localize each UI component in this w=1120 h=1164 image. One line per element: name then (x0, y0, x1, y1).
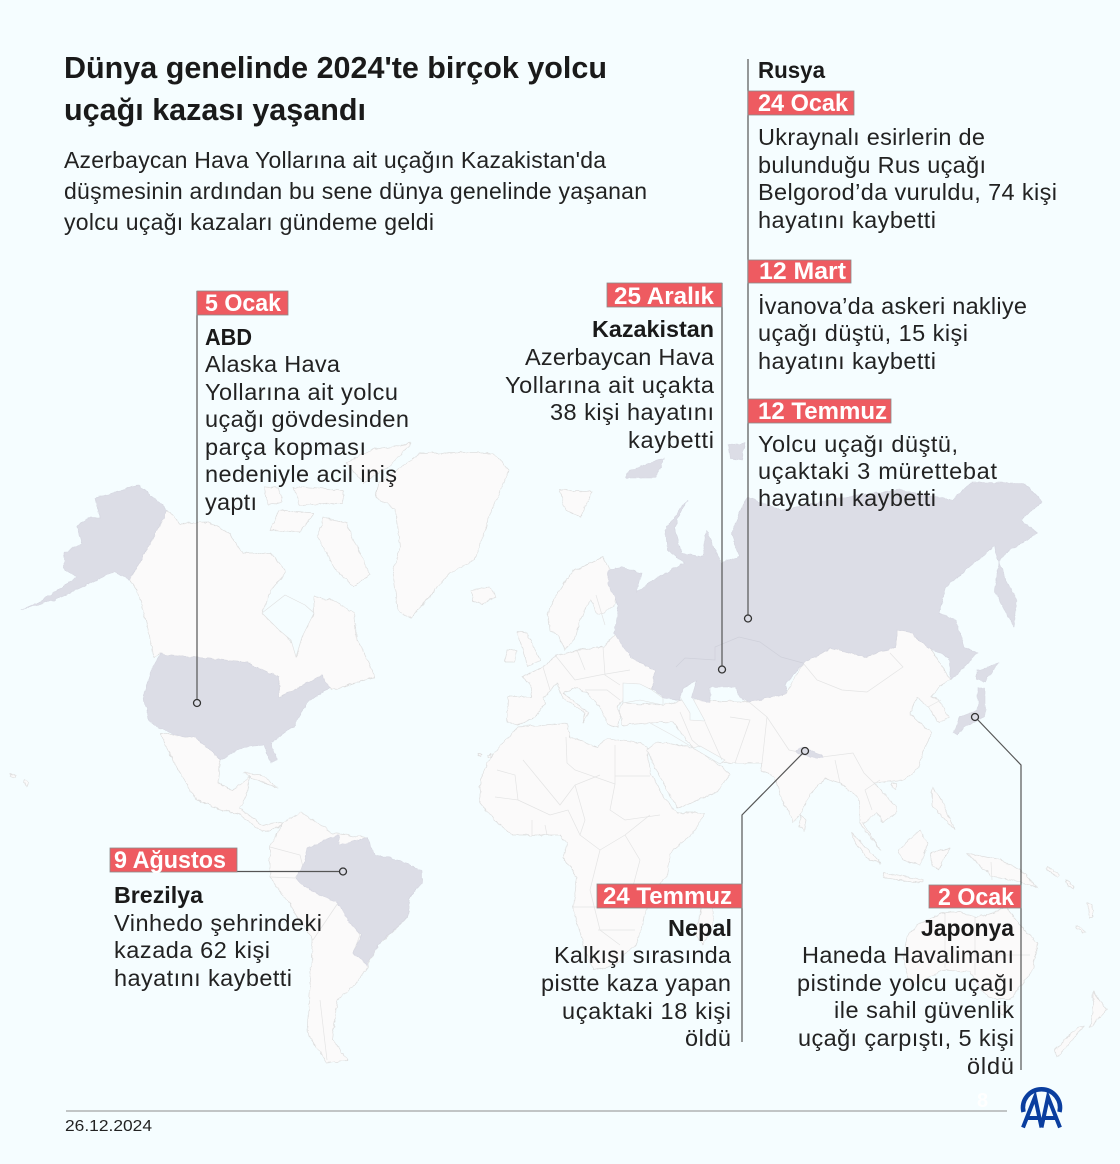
text: 12 Temmuz event: hayatını kaybetti (758, 485, 936, 511)
map: Kazakhstan border (676, 637, 803, 667)
text: 24 Ocak event (758, 124, 1057, 233)
text: ABD event: parça kopması (205, 434, 366, 460)
text: Kazakistan event: Yollarına ait uçakta (505, 372, 715, 398)
text: ABD event: nedeniyle acil iniş (205, 461, 397, 487)
map: highlighted countries (21, 443, 1042, 965)
marker: Brezilya (340, 868, 346, 875)
tag: 5 Ocak: 5 Ocak (205, 290, 282, 317)
faint page number: 8 (977, 1090, 988, 1112)
text: Brezilya event: hayatını kaybetti (114, 965, 292, 991)
country: Franz Josef Land (626, 458, 664, 478)
callout: Brezilya (110, 847, 346, 991)
text: Japonya event: uçağı çarpıştı, 5 kişi (798, 1025, 1014, 1051)
text: ABD event (205, 351, 409, 515)
text: Nepal event: uçaktaki 18 kişi (562, 998, 731, 1024)
map: inner water (262, 595, 725, 764)
leader line: Brezilya (237, 870, 340, 872)
heading: Nepal: Nepal (668, 915, 732, 941)
heading: Japonya: Japonya (921, 915, 1014, 941)
subtitle (64, 147, 647, 235)
tag: 2 Ocak: 2 Ocak (938, 884, 1015, 911)
country: Japan main (953, 687, 985, 735)
text: Nepal event: pistte kaza yapan (541, 970, 731, 996)
text: Nepal event: Kalkışı sırasında (554, 942, 732, 968)
title: Dünya genelinde 2024'te birçok yolcu (64, 50, 607, 85)
text: ABD event: Yollarına ait yolcu (205, 379, 398, 405)
text: 12 Mart event: uçağı düştü, 15 kişi (758, 320, 968, 346)
text: Kazakistan event: Azerbaycan Hava (525, 344, 715, 370)
heading: Rusya: Rusya (758, 57, 825, 83)
country: United States (143, 654, 329, 763)
text: ABD event: Alaska Hava (205, 351, 341, 377)
text: 12 Mart event: İvanova’da askeri nakliye (758, 293, 1027, 319)
text: Japonya event: öldü (967, 1053, 1014, 1079)
tag: 24 Temmuz: 24 Temmuz (603, 883, 732, 910)
leader line: ABD (196, 291, 198, 700)
text: Japonya event: Haneda Havalimanı (802, 942, 1014, 968)
subtitle: düşmesinin ardından bu sene dünya genelinde yaşanan (64, 178, 647, 204)
title (64, 50, 607, 127)
leader line: Kazakistan (721, 283, 723, 666)
marker: Rusya (744, 615, 752, 622)
text: 12 Mart event (758, 293, 1027, 374)
text: 12 Temmuz event: Yolcu uçağı düştü, (758, 431, 958, 457)
heading: ABD: ABD (205, 324, 252, 350)
country: Japan north (976, 663, 999, 682)
text: ABD event: yaptı (205, 489, 257, 515)
heading: Brezilya: Brezilya (114, 882, 203, 908)
marker: Nepal (802, 748, 808, 754)
text: Nepal event (541, 942, 732, 1051)
text: Kazakistan event (505, 344, 715, 453)
date: 26.12.2024 (65, 1118, 152, 1135)
text: Japonya event: ile sahil güvenlik (834, 997, 1014, 1023)
country: Alaska (21, 485, 168, 610)
tag: 24 Ocak: 24 Ocak (758, 90, 849, 117)
leader line: Rusya (747, 59, 749, 615)
country: Brazil (295, 835, 422, 965)
title: uçağı kazası yaşandı (64, 92, 366, 127)
text: 12 Mart event: hayatını kaybetti (758, 348, 936, 374)
text: 12 Temmuz event (758, 431, 997, 511)
footer rule (66, 1110, 1007, 1112)
world map (11, 443, 1107, 1063)
leader line: Nepal (742, 754, 802, 1042)
text: 24 Ocak event: hayatını kaybetti (758, 207, 936, 233)
subtitle: yolcu uçağı kazaları gündeme geldi (64, 209, 434, 235)
text: 24 Ocak event: bulunduğu Rus uçağı (758, 152, 986, 178)
callout: Rusya (744, 57, 1057, 622)
text: 24 Ocak event: Belgorod’da vuruldu, 74 kişi (758, 179, 1057, 205)
tag: 12 Temmuz: 12 Temmuz (758, 398, 887, 425)
tag: 12 Mart: 12 Mart (759, 258, 846, 285)
text: Kazakistan event: 38 kişi hayatını (550, 399, 714, 425)
callout: ABD (194, 290, 409, 706)
country: Nepal (796, 747, 822, 758)
country: Russia and Kazakhstan (608, 483, 1042, 702)
text: Brezilya event: kazada 62 kişi (114, 937, 270, 963)
heading: Kazakistan: Kazakistan (592, 316, 714, 342)
subtitle: Azerbaycan Hava Yollarına ait uçağın Kazakistan'da (64, 147, 606, 173)
text: Kazakistan event: kaybetti (628, 427, 714, 453)
country: Sakhalin (994, 563, 1017, 627)
marker: Japonya (972, 714, 978, 720)
map: borders (270, 595, 1030, 1060)
leader line: Japonya (978, 720, 1021, 1070)
text: Japonya event (797, 942, 1014, 1079)
text: Nepal event: öldü (685, 1025, 731, 1051)
country: Severnaya Zemlya (728, 443, 745, 460)
text: Brezilya event: Vinhedo şehrindeki (114, 910, 322, 936)
text: ABD event: uçağı gövdesinden (205, 406, 409, 432)
icon: AA logo (1023, 1089, 1060, 1128)
text: 12 Temmuz event: uçaktaki 3 mürettebat (758, 458, 997, 484)
map: base land (11, 443, 1107, 1063)
callout: Kazakistan (505, 283, 726, 673)
tag: 9 Ağustos: 9 Ağustos (114, 847, 226, 874)
text: Brezilya event (114, 910, 322, 991)
text: 24 Ocak event: Ukraynalı esirlerin de (758, 124, 985, 150)
text: Japonya event: pistinde yolcu uçağı (797, 970, 1014, 996)
callout: Japonya (797, 714, 1021, 1079)
marker: Kazakistan (718, 666, 726, 673)
callout: Nepal (541, 748, 808, 1051)
marker: ABD (194, 700, 200, 706)
tag: 25 Aralık: 25 Aralık (614, 283, 715, 310)
